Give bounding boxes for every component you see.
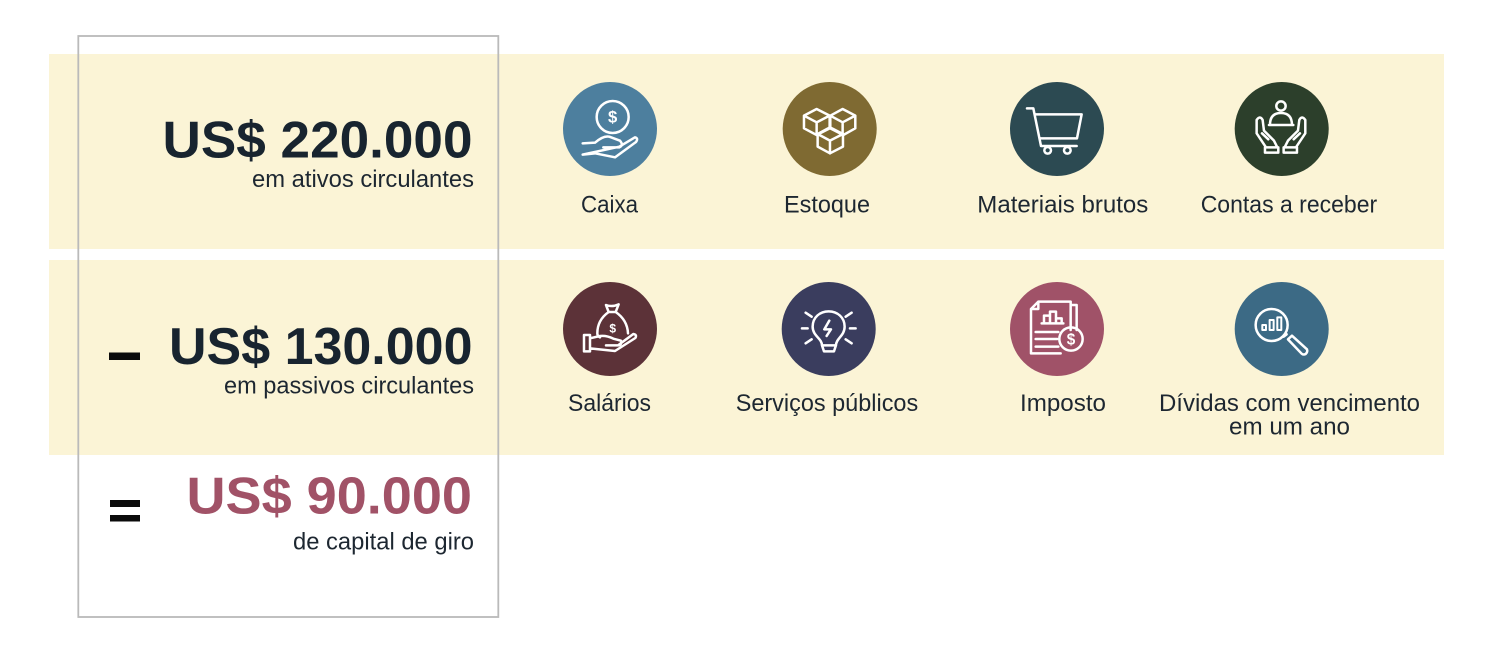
- item: Dívidas com vencimento em um ano: [1159, 282, 1420, 440]
- icon: hand holding money bag: $: [609, 322, 616, 336]
- item: Imposto: Imposto: [1020, 390, 1106, 417]
- item: Contas a receber: Contas a receber: [1201, 192, 1377, 218]
- item: Serviços públicos: [736, 282, 918, 417]
- icon: hand holding coin: $: [608, 108, 618, 127]
- assets amount: em ativos circulantes: [252, 166, 474, 193]
- item: Dívidas com vencimento em um ano: em um ano: [1229, 414, 1350, 440]
- assets amount: [162, 112, 474, 193]
- working capital amount: de capital de giro: [293, 528, 474, 556]
- icon: document with coin: $: [1067, 332, 1076, 349]
- item: Materiais brutos: [977, 82, 1148, 218]
- icon: hands holding person: [1235, 82, 1329, 176]
- calculation frame: [78, 36, 498, 617]
- item: Salários: [563, 282, 657, 417]
- icon: magnifier with chart: [1235, 282, 1329, 376]
- liabilities amount: em passivos circulantes: [224, 372, 474, 400]
- icon: light bulb: [782, 282, 876, 376]
- working capital amount: [186, 468, 474, 556]
- item: Imposto: [1010, 282, 1106, 417]
- item: Materiais brutos: Materiais brutos: [977, 192, 1148, 218]
- item: Caixa: [563, 82, 657, 218]
- item: Estoque: Estoque: [784, 192, 870, 218]
- item: Dívidas com vencimento em um ano: Dívidas com vencimento: [1159, 390, 1420, 417]
- panel: current assets band: [49, 54, 1444, 249]
- working capital amount: US$ 90.000: [186, 468, 472, 526]
- liabilities amount: US$ 130.000: [169, 318, 472, 376]
- icon: shopping cart: [1010, 82, 1104, 176]
- item: Salários: Salários: [568, 390, 651, 417]
- panel: current liabilities band: [49, 260, 1444, 455]
- minus sign: [109, 352, 140, 360]
- item: Caixa: Caixa: [581, 192, 639, 218]
- assets amount: US$ 220.000: [162, 112, 472, 170]
- item: Serviços públicos: Serviços públicos: [736, 390, 918, 417]
- item: Estoque: [783, 82, 877, 218]
- icon: cubes: [783, 82, 877, 176]
- item: Contas a receber: [1201, 82, 1377, 218]
- equals sign: [110, 500, 140, 522]
